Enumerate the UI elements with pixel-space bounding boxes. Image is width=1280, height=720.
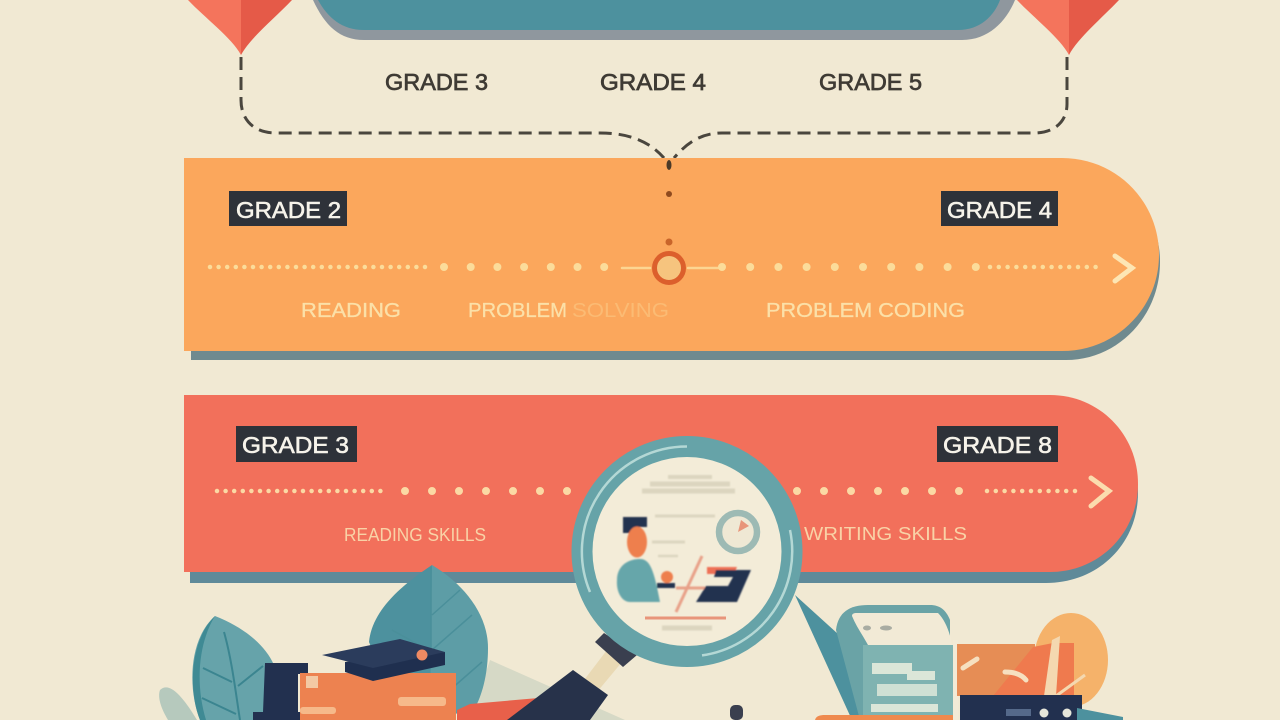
pill: grade 4: GRADE 4 — [947, 197, 1052, 223]
milestone marker — [654, 254, 684, 282]
illustration: backdrop triangle — [470, 660, 625, 720]
figure at laptop — [617, 517, 751, 612]
top banner — [313, 0, 1015, 40]
panel: orange timeline — [184, 158, 1160, 360]
illustration: right leaf — [369, 565, 488, 720]
illustration: red book — [457, 697, 560, 720]
pill: grade 8: GRADE 8 — [943, 432, 1052, 458]
icon: clock — [719, 513, 757, 551]
skill labels: READING — [301, 300, 401, 322]
pill: grade 3 — [236, 426, 357, 462]
illustration: orange objects — [957, 613, 1108, 707]
illustration: device — [836, 605, 958, 720]
grade labels row: GRADE 5 — [819, 69, 922, 95]
illustration: dark scroll — [253, 663, 308, 720]
pill: grade 4 — [941, 191, 1058, 226]
icon: left pennant — [188, 0, 292, 55]
illustration: dark case — [960, 695, 1082, 720]
panel: red timeline — [184, 395, 1138, 583]
dotted timeline — [217, 478, 1109, 506]
magnifier lens — [582, 446, 792, 656]
illustration: small dark stub — [730, 705, 743, 720]
illustration: teal wedge — [795, 595, 872, 720]
illustration: orange base — [815, 715, 953, 720]
skill labels — [301, 300, 965, 322]
lens lines — [642, 477, 735, 628]
illustration: left leaf — [192, 616, 274, 720]
illustration: pale small leaf — [159, 687, 197, 720]
illustration: graduation cap — [322, 639, 445, 681]
grade labels row: GRADE 3 — [385, 69, 488, 95]
icon: right pennant — [1017, 0, 1119, 55]
pill: grade 2: GRADE 2 — [236, 197, 341, 223]
pill: grade 3: GRADE 3 — [242, 432, 349, 458]
illustration: teal corner — [1077, 708, 1123, 720]
grade labels row: GRADE 4 — [600, 69, 706, 95]
skill labels: PROBLEM CODING — [766, 300, 965, 322]
skill labels: WRITING SKILLS — [804, 524, 967, 544]
pill: grade 8 — [937, 426, 1058, 462]
pill: grade 2 — [229, 191, 347, 226]
skill labels: SOLVING — [572, 300, 669, 322]
dotted timeline — [210, 256, 1132, 281]
dashed connector — [241, 57, 1067, 158]
connector marks on orange panel — [666, 160, 672, 246]
illustration: magnifier handle — [507, 633, 637, 720]
lens base line — [645, 616, 726, 620]
skill labels — [344, 524, 967, 545]
skill labels: READING SKILLS — [344, 525, 486, 545]
skill labels: PROBLEM — [468, 300, 567, 322]
grade labels row — [385, 69, 922, 95]
illustration: orange books — [300, 673, 456, 720]
